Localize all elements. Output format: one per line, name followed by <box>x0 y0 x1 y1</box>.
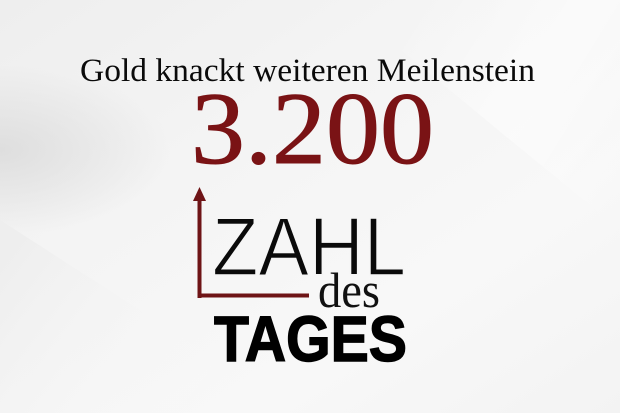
logo word: ZAHL: ZAHL <box>212 200 406 293</box>
arrow: rising axis <box>193 187 309 298</box>
logo word: des: des <box>318 262 380 318</box>
big number: 3.200 <box>191 72 434 186</box>
heading: Gold knackt weiteren Meilenstein <box>80 53 535 89</box>
logo word: TAGES: TAGES <box>214 303 407 375</box>
